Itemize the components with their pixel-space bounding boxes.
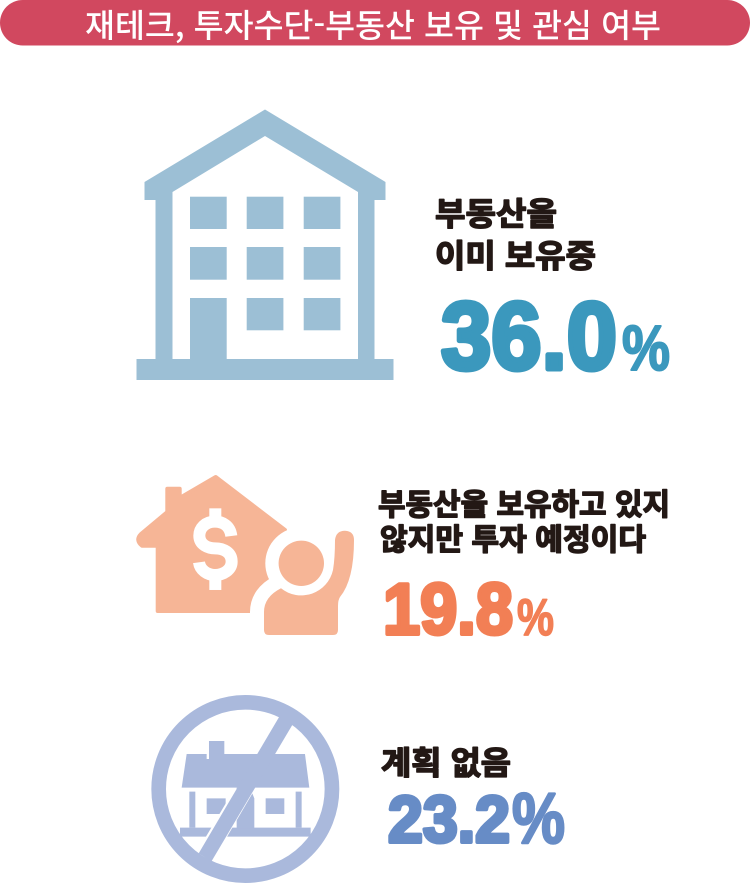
value: 23.2%: 23.2: [388, 782, 510, 856]
value: 36.0%: 36.0: [441, 283, 617, 390]
icon: apartment building: [136, 110, 394, 380]
icon: house prohibited: [159, 702, 332, 876]
label: already own: 부동산을: [435, 189, 557, 235]
value: 36.0%: %: [622, 312, 670, 384]
value: 23.2%: [388, 780, 565, 859]
label: plan to invest: [378, 480, 670, 559]
label: already own: [435, 189, 596, 277]
icon: dollar sign: [199, 508, 232, 590]
icon: house with dollar and raised hand person: [138, 477, 354, 635]
title banner: 재테크, 투자수단-부동산 보유 및 관심 여부: [85, 0, 661, 47]
label: no plan: 계획 없음: [381, 738, 511, 784]
value: 23.2%: %: [512, 780, 565, 859]
label: plan to invest: 않지만 투자 예정이다: [380, 515, 646, 559]
value: 19.8%: %: [517, 589, 554, 647]
label: plan to invest: 부동산을 보유하고 있지: [378, 480, 670, 524]
value: 19.8%: 19.8: [383, 570, 513, 650]
label: already own: 이미 보유중: [435, 231, 596, 277]
